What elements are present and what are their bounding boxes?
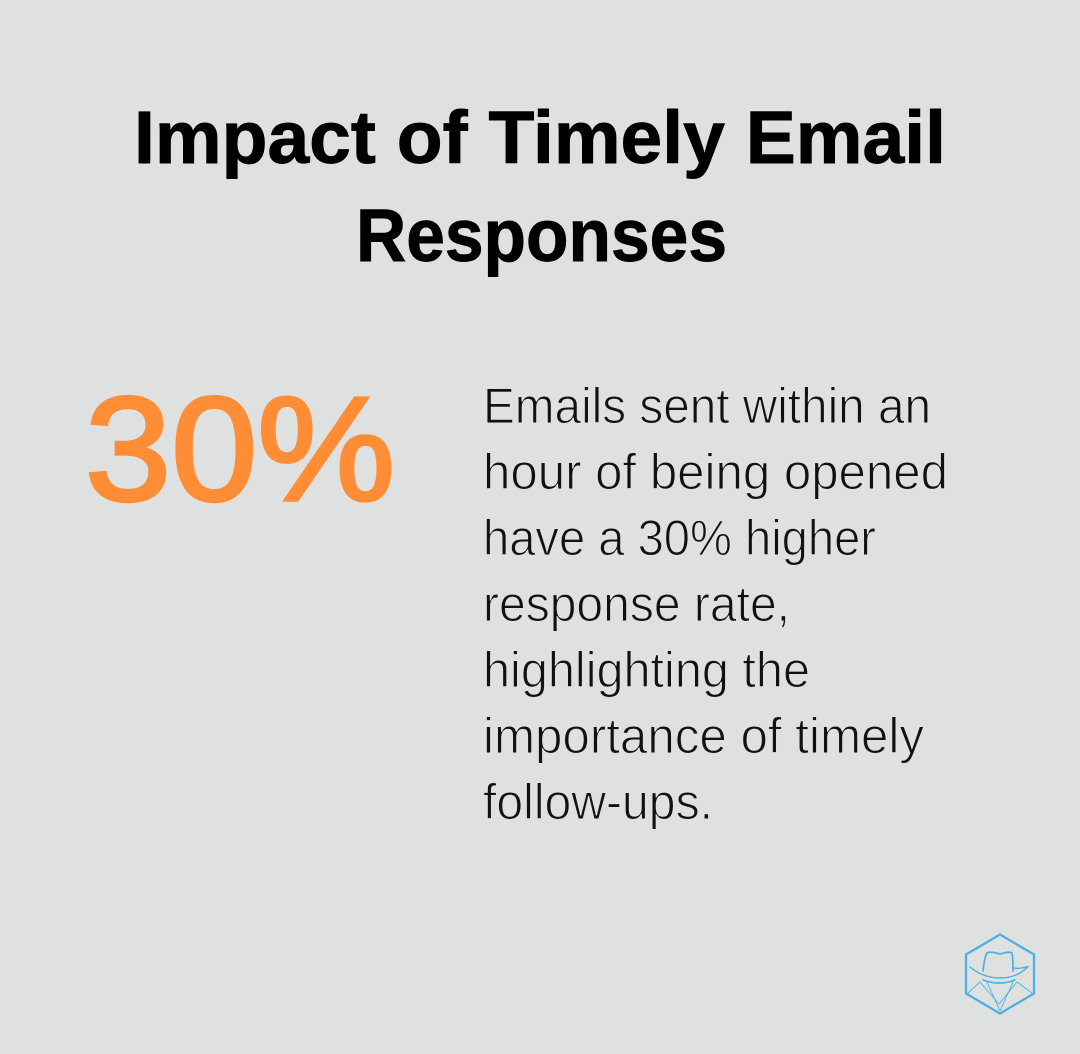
icon: hexagon spy logo xyxy=(966,934,1034,1014)
big stat: 30%: 30% xyxy=(85,367,395,532)
description text: highlighting the xyxy=(483,642,810,698)
description text: response rate, xyxy=(483,576,790,632)
description text: Emails sent within an xyxy=(483,378,931,434)
description text xyxy=(483,378,948,830)
title xyxy=(134,96,946,277)
description text: hour of being opened xyxy=(483,444,948,500)
description text: have a 30% higher xyxy=(483,510,876,566)
title: Impact of Timely Email xyxy=(134,96,946,179)
description text: follow-ups. xyxy=(483,774,713,830)
title: Responses xyxy=(356,194,727,277)
description text: importance of timely xyxy=(483,708,924,764)
